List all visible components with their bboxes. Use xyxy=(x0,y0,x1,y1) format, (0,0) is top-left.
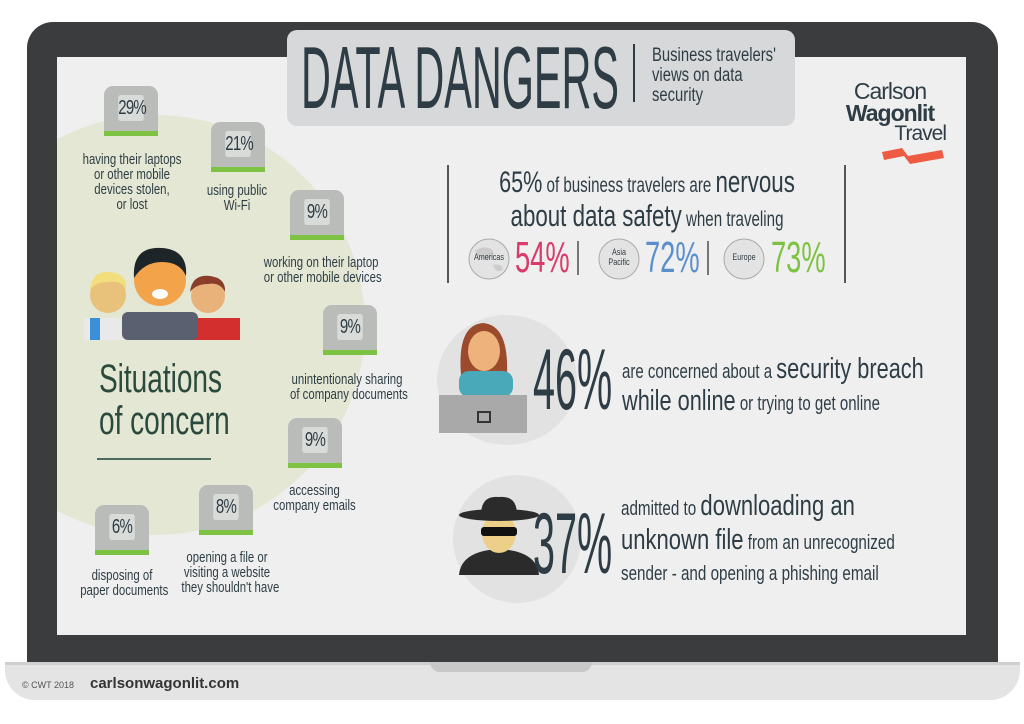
description: admitted to downloading an xyxy=(621,490,855,522)
stat 8%: 8% xyxy=(216,496,236,518)
subtitle: security xyxy=(652,85,703,106)
title box xyxy=(287,30,795,126)
panel: situations of concern: devices stolen, xyxy=(94,181,170,198)
icon: woman at laptop xyxy=(439,323,527,433)
big number 46%: 46% xyxy=(533,332,612,428)
stat 6%: 6% xyxy=(112,516,132,538)
green circle xyxy=(0,115,365,535)
stat 21%: 21% xyxy=(225,133,253,155)
panel: situations of concern: unintentionaly sharing xyxy=(292,371,402,388)
stat 9% laptop xyxy=(290,190,344,240)
panel: situations of concern: paper documents xyxy=(80,582,168,599)
regions: Americas xyxy=(474,252,504,262)
stat 29% xyxy=(104,86,158,136)
stat 9% sharing xyxy=(323,305,377,355)
description: unknown file from an unrecognized xyxy=(621,524,895,556)
headline text: 65% of business travelers are nervous xyxy=(499,164,795,199)
heading: situations of concern xyxy=(99,357,230,443)
panel: situations of concern: having their laptops xyxy=(83,151,181,168)
regions: 73% xyxy=(771,233,826,282)
stat 8% xyxy=(199,485,253,535)
description: sender - and opening a phishing email xyxy=(621,563,879,585)
headline text: about data safety when traveling xyxy=(511,198,783,233)
icon: hacker xyxy=(459,496,539,575)
stat 29%: 29% xyxy=(118,97,146,119)
panel: situations of concern: working on their laptop xyxy=(264,254,379,271)
regions: Asia xyxy=(612,247,626,257)
heading: situations of concern: Situations xyxy=(99,357,222,401)
notch xyxy=(430,662,592,672)
panel: situations of concern: opening a file or xyxy=(186,549,268,566)
title: DATA DANGERS xyxy=(301,28,619,127)
regions: 72% xyxy=(645,233,700,282)
screen xyxy=(57,57,966,635)
panel: situations of concern: disposing of xyxy=(92,567,152,584)
regions xyxy=(468,233,826,282)
panel: 46% security breach xyxy=(437,315,924,445)
laptop base xyxy=(5,662,1020,700)
logo: Wagonlit xyxy=(846,100,934,126)
stat 9% laptop: 9% xyxy=(307,201,327,223)
headline text xyxy=(499,164,795,233)
stat 6% xyxy=(95,505,149,555)
logo xyxy=(846,78,946,164)
description: are concerned about a security breach xyxy=(622,353,924,385)
stat 21% xyxy=(211,122,265,172)
regions: 54% xyxy=(515,233,570,282)
panel: 37% unknown file xyxy=(453,475,895,603)
logo: Carlson xyxy=(854,78,926,104)
panel: situations of concern: or other mobile devices xyxy=(264,269,382,286)
panel: situations of concern: company emails xyxy=(273,497,356,514)
panel: 65% nervous xyxy=(447,164,846,283)
logo: Travel xyxy=(894,122,946,145)
panel: situations of concern: Wi-Fi xyxy=(224,197,250,214)
panel: situations of concern: or other mobile xyxy=(94,166,170,183)
panel: situations of concern: of company documents xyxy=(290,386,408,403)
panel: situations of concern xyxy=(80,86,408,599)
regions: Europe xyxy=(732,252,756,262)
description xyxy=(621,490,895,585)
stat 9% emails: 9% xyxy=(305,429,325,451)
big number 37%: 37% xyxy=(533,496,612,592)
subtitle xyxy=(652,45,776,106)
text: carlsonwagonlit.com xyxy=(90,675,239,692)
heading: situations of concern: of concern xyxy=(99,399,230,443)
icon: group of people xyxy=(84,248,240,340)
stat 9% emails xyxy=(288,418,342,468)
stat 9% sharing: 9% xyxy=(340,316,360,338)
description: while online or trying to get online xyxy=(622,385,880,417)
panel: situations of concern: accessing xyxy=(289,482,340,499)
panel: situations of concern: using public xyxy=(207,182,267,199)
subtitle: Business travelers' xyxy=(652,45,776,66)
panel: situations of concern: visiting a website xyxy=(184,564,270,581)
regions: Pacific xyxy=(608,257,630,267)
footer: © CWT 2018 xyxy=(22,680,74,690)
panel: situations of concern: or lost xyxy=(116,196,148,213)
description xyxy=(622,353,924,417)
panel: situations of concern: they shouldn't have xyxy=(181,579,279,596)
subtitle: views on data xyxy=(652,65,743,86)
